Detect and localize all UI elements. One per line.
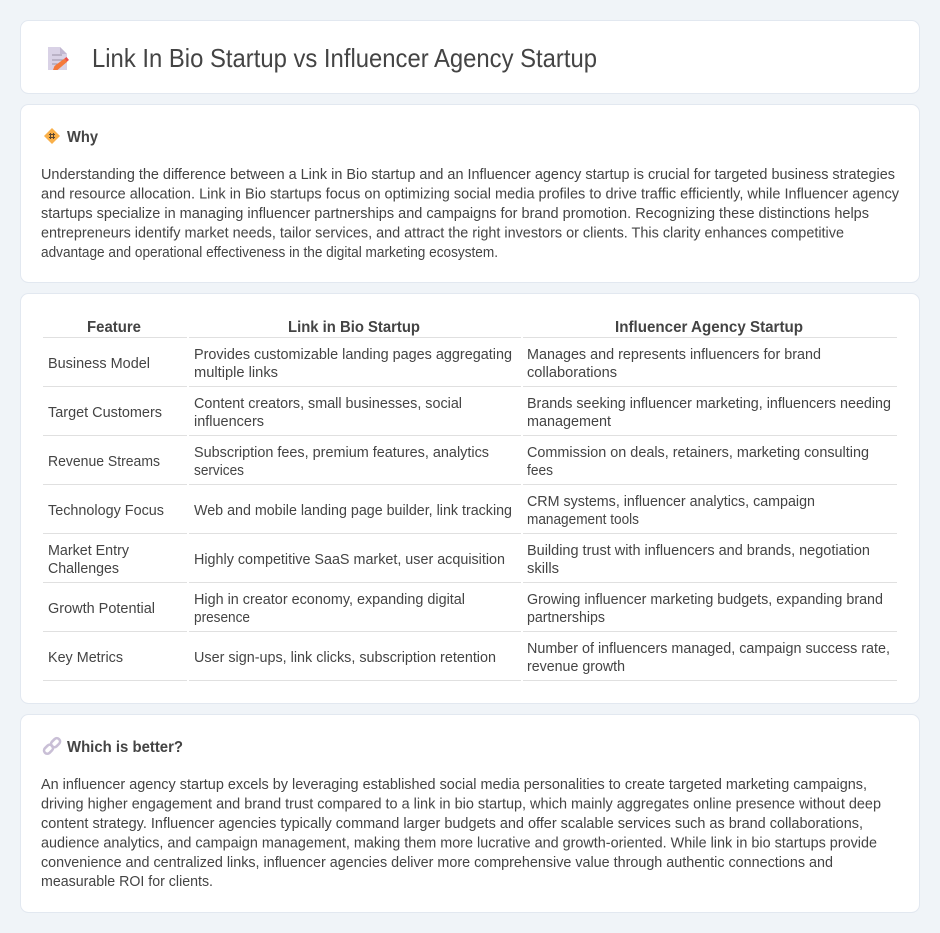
row: key metrics: User sign-ups, link clicks, subscription retention xyxy=(194,650,496,666)
title text: Link In Bio Startup vs Influencer Agency Startup xyxy=(92,45,597,73)
row: technology focus: Technology Focus xyxy=(48,503,164,519)
icon: link xyxy=(43,737,61,755)
row: growth potential: High in creator economy, expanding digital xyxy=(194,592,465,608)
row: technology focus xyxy=(48,494,815,528)
row: revenue streams: fees xyxy=(527,463,553,479)
row: key metrics xyxy=(48,641,890,675)
row: market entry challenges: Challenges xyxy=(48,561,119,577)
which is better body text xyxy=(41,777,881,890)
row: target customers: influencers xyxy=(194,414,264,430)
row: business model: Provides customizable landing pages aggregating xyxy=(194,347,512,363)
row: target customers: Target Customers xyxy=(48,405,162,421)
panel: title xyxy=(20,20,920,94)
row: target customers: Content creators, small businesses, social xyxy=(194,396,462,412)
which is better body text: convenience and centralized links, influencer agencies deliver more comprehensive value through authentic connections and xyxy=(41,855,833,871)
row: revenue streams: services xyxy=(194,463,244,479)
why body text: advantage and operational effectiveness in the digital marketing ecosystem. xyxy=(41,245,498,261)
panel: why xyxy=(20,104,920,282)
why body text: Understanding the difference between a Link in Bio startup and an Influencer agency startup is crucial for targeted business strategies xyxy=(41,167,895,183)
row: business model: Manages and represents influencers for brand xyxy=(527,347,821,363)
row: market entry challenges: Highly competitive SaaS market, user acquisition xyxy=(194,552,505,568)
row: growth potential: Growth Potential xyxy=(48,601,155,617)
row: revenue streams xyxy=(48,445,869,479)
why body text xyxy=(41,167,900,261)
table header xyxy=(87,319,803,336)
row: revenue streams: Commission on deals, retainers, marketing consulting xyxy=(527,445,869,461)
panel: which is better xyxy=(20,714,920,912)
heading: why: Why xyxy=(67,129,98,146)
row: key metrics: revenue growth xyxy=(527,659,625,675)
row: market entry challenges xyxy=(48,543,870,577)
row: technology focus: management tools xyxy=(527,512,639,528)
which is better body text: content strategy. Influencer agencies typically command larger budgets and offer scalable services such as brand collaborations, xyxy=(41,816,863,832)
row: business model: collaborations xyxy=(527,365,617,381)
row: growth potential: Growing influencer marketing budgets, expanding brand xyxy=(527,592,883,608)
row: growth potential: partnerships xyxy=(527,610,605,626)
row: key metrics: Number of influencers managed, campaign success rate, xyxy=(527,641,890,657)
heading: which is better: Which is better? xyxy=(67,739,183,756)
row: technology focus: Web and mobile landing page builder, link tracking xyxy=(194,503,512,519)
row: business model: Business Model xyxy=(48,356,150,372)
row: target customers: Brands seeking influencer marketing, influencers needing xyxy=(527,396,891,412)
row: growth potential: presence xyxy=(194,610,250,626)
row: target customers xyxy=(48,396,891,430)
table header: Influencer Agency Startup xyxy=(615,319,803,336)
which is better body text: measurable ROI for clients. xyxy=(41,874,213,890)
row: market entry challenges: skills xyxy=(527,561,559,577)
icon: memo with pencil xyxy=(48,47,69,70)
row: revenue streams: Subscription fees, premium features, analytics xyxy=(194,445,489,461)
row: target customers: management xyxy=(527,414,611,430)
why body text: startups specialize in managing influencer partnerships and campaigns for brand promotion. Recognizing these distinctions helps xyxy=(41,206,869,222)
row: business model: multiple links xyxy=(194,365,278,381)
row: market entry challenges: Building trust with influencers and brands, negotiation xyxy=(527,543,870,559)
row: key metrics: Key Metrics xyxy=(48,650,123,666)
why body text: entrepreneurs identify market needs, tailor services, and attract the right investors or clients. This clarity enhances competitive xyxy=(41,226,844,242)
row: market entry challenges: Market Entry xyxy=(48,543,130,559)
panel: comparison table xyxy=(20,294,920,704)
row: technology focus: CRM systems, influencer analytics, campaign xyxy=(527,494,815,510)
why body text: and resource allocation. Link in Bio startups focus on optimizing social media profiles to drive traffic efficiently, while Influencer agency xyxy=(41,186,900,202)
row: revenue streams: Revenue Streams xyxy=(48,454,160,470)
row: business model xyxy=(48,347,821,381)
table header: Link in Bio Startup xyxy=(288,319,420,336)
table header: Feature xyxy=(87,319,141,336)
which is better body text: audience analytics, and campaign management, making them more lucrative and growth-oriented. While link in bio startups provide xyxy=(41,836,877,852)
which is better body text: An influencer agency startup excels by leveraging established social media personalities to create targeted marketing campaigns, xyxy=(41,777,867,793)
row: growth potential xyxy=(48,592,883,626)
icon: diamond xyxy=(44,128,60,144)
which is better body text: driving higher engagement and brand trust compared to a link in bio startup, which mainly aggregates online presence without deep xyxy=(41,796,881,812)
